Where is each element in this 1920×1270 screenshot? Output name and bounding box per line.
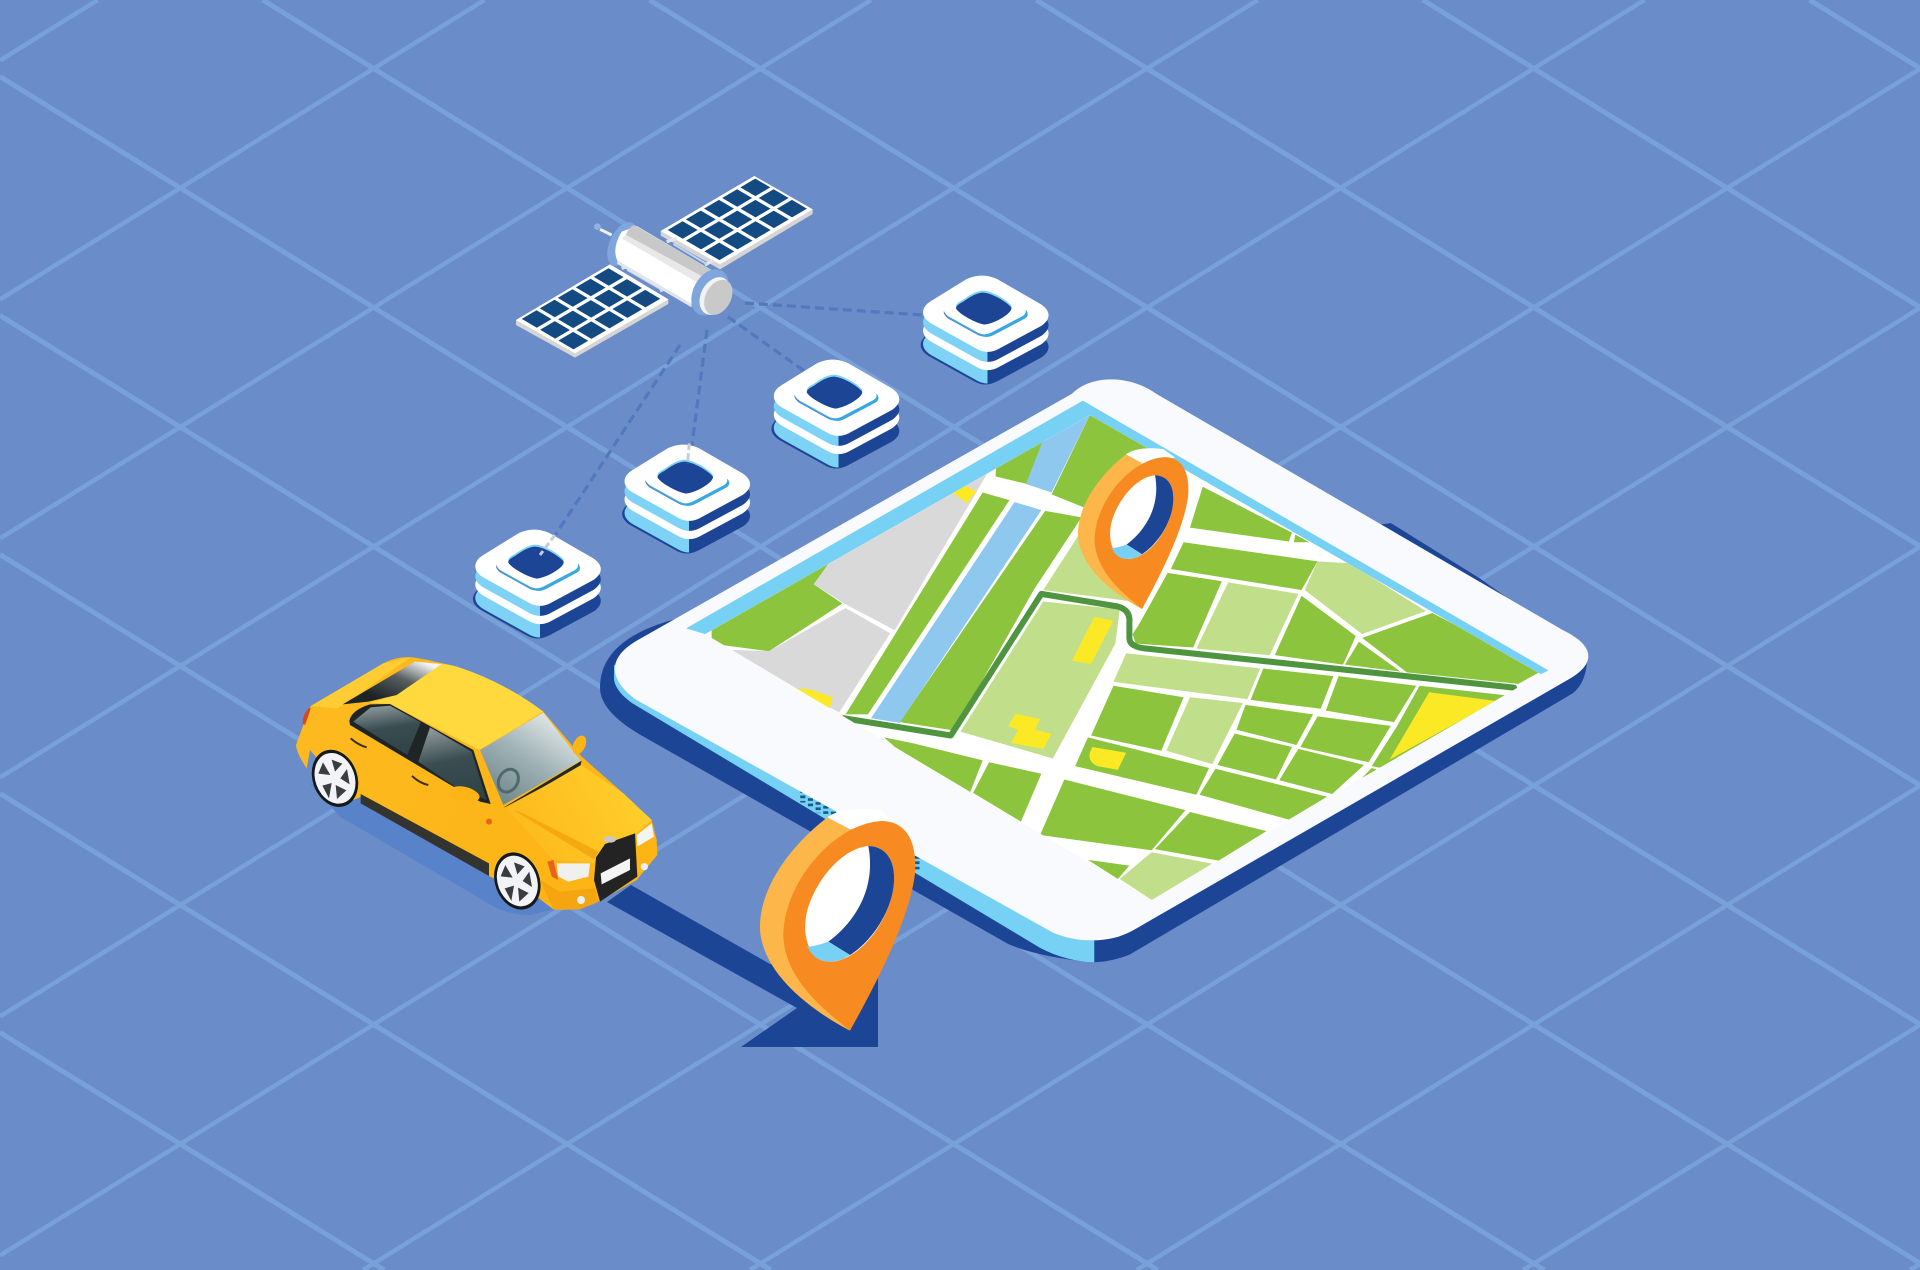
upper pin front (1095, 457, 1188, 609)
river (868, 408, 1090, 743)
door handles (351, 738, 428, 785)
tablet with city map (600, 379, 1589, 962)
grey districts (721, 470, 989, 713)
map pin: lower (760, 809, 915, 1031)
car shadow (310, 783, 557, 915)
grille (594, 833, 637, 902)
number plate (601, 858, 630, 884)
upper pin top edge (1126, 448, 1175, 463)
satellite signal lines (552, 303, 922, 540)
pin top edge (827, 809, 897, 829)
car (296, 657, 657, 916)
body lower edge (617, 261, 692, 307)
signal block 3 (771, 360, 899, 468)
pin inner floor (807, 942, 850, 962)
tablet drop shadow and dark side (600, 523, 1587, 962)
front wheel (486, 846, 548, 916)
hood crease (513, 810, 598, 859)
side skirt (361, 794, 489, 876)
headlights (547, 823, 654, 904)
yellow buildings (1008, 617, 1496, 770)
light green blocks (960, 531, 1426, 900)
signal block 2 (622, 443, 750, 553)
car body (296, 657, 657, 910)
route path with arrowhead (607, 885, 878, 1047)
upper pin inner floor (1111, 545, 1142, 559)
upper solar panel (661, 176, 813, 269)
satellite body (615, 226, 718, 304)
green parks and blocks (712, 415, 1543, 879)
lower solar panel (516, 264, 668, 358)
side mirrors (449, 733, 589, 805)
tablet speaker grille (803, 790, 917, 871)
windshield (480, 713, 581, 805)
upper pin inner wall (1127, 475, 1173, 554)
screen bevel (686, 401, 1548, 674)
city map (706, 415, 1540, 900)
front side window (418, 727, 487, 800)
rear window (343, 662, 442, 704)
hood (507, 765, 652, 863)
pin front (783, 821, 915, 1031)
pin inner wall (828, 846, 894, 955)
upper pin back (1078, 454, 1142, 609)
map base roads (706, 415, 1540, 674)
rear wheel (304, 743, 366, 814)
upper pin hole (1110, 475, 1173, 559)
turn marker (486, 819, 492, 825)
front bumper shade (540, 880, 598, 909)
signal block 1 (473, 530, 601, 638)
pin back (760, 817, 850, 1031)
antenna (594, 223, 612, 235)
front cap highlight (693, 272, 737, 320)
body upper shading (626, 225, 718, 280)
front cap (698, 275, 738, 320)
rear side window (353, 706, 421, 755)
side window frame (349, 704, 491, 804)
signal block 4 (921, 276, 1049, 384)
tablet light blue side (614, 665, 1094, 962)
pin hole (805, 846, 894, 962)
tablet top face (615, 379, 1588, 940)
panel struts (622, 238, 713, 291)
yellow corners in grey district (788, 485, 976, 709)
satellite (516, 176, 813, 358)
rear deck (311, 657, 410, 708)
front ring (684, 263, 736, 322)
green route line on map (844, 594, 1514, 735)
body highlight (622, 235, 709, 285)
rear ring (601, 217, 644, 270)
roof (370, 664, 543, 750)
wiper cowl (503, 761, 582, 808)
steering wheel (494, 766, 522, 796)
map pin: upper (1078, 448, 1188, 609)
rear lamp (303, 707, 311, 725)
